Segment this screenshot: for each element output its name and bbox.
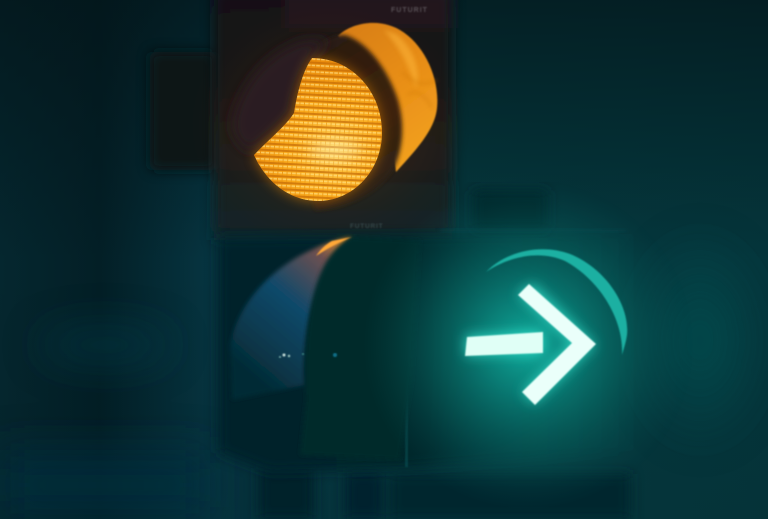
background haze	[0, 230, 768, 519]
icon: amber hood	[232, 23, 437, 210]
labels: faint maker marks on housings	[350, 7, 428, 230]
icon: green arrow signal head	[363, 180, 693, 510]
panel: upper signal housing	[214, 0, 452, 240]
panel: lower signal housing	[218, 190, 640, 472]
icon: lower left visor with reflected light	[230, 237, 420, 460]
amber glow around lens	[190, 0, 470, 250]
arrow glow	[465, 283, 596, 404]
labels: faint maker marks on housings: FUTURIT	[350, 223, 383, 230]
small reflected lights	[279, 353, 337, 358]
signal pole and mount	[150, 52, 630, 519]
green arrow head	[518, 284, 596, 405]
icon: amber LED lens	[240, 50, 390, 210]
green arrow shaft	[465, 332, 543, 356]
labels: faint maker marks on housings: FUTURIT	[391, 7, 428, 14]
